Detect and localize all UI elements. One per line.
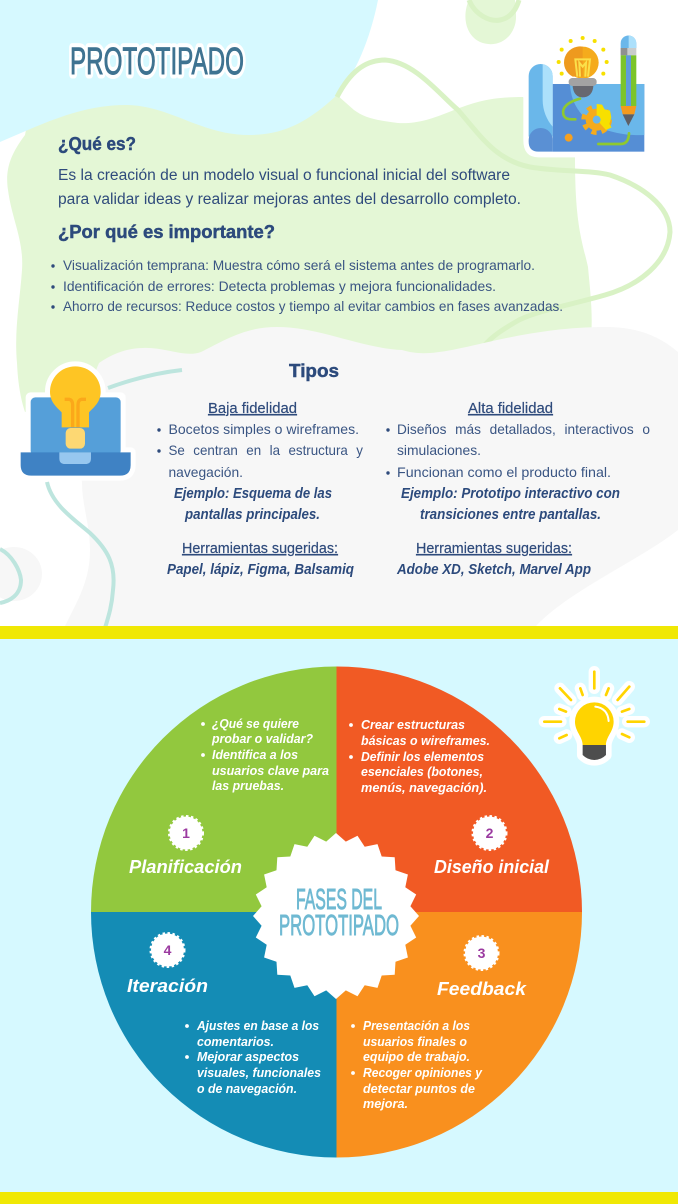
column: baja fidelidad: navegación. — [168, 464, 243, 480]
badge 1 — [169, 816, 203, 850]
column: alta fidelidad: Herramientas sugeridas: — [416, 541, 572, 557]
badge 3 — [464, 936, 498, 970]
column: baja fidelidad: Herramientas sugeridas: — [182, 541, 338, 557]
title: PROTOTIPADO — [70, 41, 244, 83]
list: importance: Identificación de errores: Detecta problemas y mejora funcionalidades. — [63, 278, 496, 294]
column: baja fidelidad: pantallas principales. — [184, 507, 320, 523]
background: teal line upper — [108, 370, 182, 388]
icon: laptop with bulb — [21, 366, 131, 476]
text: feedback points: usuarios finales o — [363, 1035, 467, 1049]
heading: tipos: Tipos — [289, 360, 339, 381]
background: cyan blob — [0, 0, 378, 142]
heading: por que es importante: ¿Por qué es importante? — [58, 221, 275, 242]
column: alta fidelidad: transiciones entre pantallas. — [420, 507, 601, 523]
text: feedback points: detectar puntos de — [363, 1082, 475, 1096]
segment: diseno inicial — [336, 666, 582, 912]
text: planificacion points: probar o validar? — [211, 732, 313, 746]
background: grey blob — [65, 327, 678, 626]
background: long green wavy line — [337, 60, 670, 346]
text: planificacion points: usuarios clave para — [212, 764, 329, 778]
text: diseno points: esenciales (botones, — [361, 765, 483, 779]
column: alta fidelidad: Adobe XD, Sketch, Marvel App — [396, 562, 591, 578]
badge 4: 4 — [164, 942, 172, 958]
icon: light bulb with rays — [544, 672, 644, 760]
center title — [279, 884, 399, 942]
text: feedback points: mejora. — [363, 1097, 408, 1111]
text: diseno points: menús, navegación). — [361, 781, 487, 795]
badge 4 — [150, 933, 184, 967]
column: baja fidelidad: Ejemplo: Esquema de las — [174, 486, 332, 502]
badge 3: 3 — [478, 945, 486, 961]
list: importance: Visualización temprana: Muestra cómo será el sistema antes de programarlo. — [63, 257, 535, 273]
text block: definition — [58, 167, 521, 208]
text: feedback points: Presentación a los — [363, 1019, 470, 1033]
icon: blueprint with bulb and pencil — [523, 35, 644, 157]
column: alta fidelidad: simulaciones. — [397, 442, 481, 458]
label: diseno inicial: Diseño inicial — [434, 856, 550, 877]
column: baja fidelidad: Baja fidelidad — [208, 401, 297, 417]
text: planificacion points — [201, 717, 329, 793]
heading: que es: ¿Qué es? — [58, 133, 136, 154]
label: planificacion: Planificación — [129, 856, 242, 877]
text: diseno points: Definir los elementos — [361, 750, 484, 764]
column: alta fidelidad — [386, 401, 650, 578]
text: feedback points — [351, 1019, 483, 1111]
text: iteracion points: Mejorar aspectos — [197, 1050, 299, 1064]
yellow band bottom — [0, 1192, 678, 1204]
segment: iteracion — [91, 912, 336, 1158]
column: baja fidelidad: Papel, lápiz, Figma, Balsamiq — [167, 562, 354, 578]
text block: definition: para validar ideas y realizar mejoras antes del desarrollo completo. — [58, 191, 521, 208]
column: baja fidelidad: Bocetos simples o wireframes. — [168, 421, 359, 437]
background: small green blob — [465, 0, 516, 44]
column: alta fidelidad: Diseños más detallados, interactivos o — [397, 421, 650, 437]
text: feedback points: Recoger opiniones y — [363, 1066, 483, 1080]
text: iteracion points — [185, 1019, 321, 1096]
title — [70, 41, 244, 83]
column: alta fidelidad: Ejemplo: Prototipo interactivo con — [401, 486, 620, 502]
text: planificacion points: ¿Qué se quiere — [212, 717, 299, 731]
yellow band top — [0, 626, 678, 639]
text: iteracion points: Ajustes en base a los — [196, 1019, 319, 1033]
list: importance: Ahorro de recursos: Reduce costos y tiempo al evitar cambios en fases avanzadas. — [63, 298, 563, 314]
badge 1: 1 — [182, 825, 190, 841]
text: feedback points: equipo de trabajo. — [363, 1050, 470, 1064]
text: iteracion points: visuales, funcionales — [197, 1066, 321, 1080]
segment: feedback — [336, 912, 582, 1158]
column: alta fidelidad: Funcionan como el producto final. — [397, 464, 611, 480]
phases wheel — [91, 666, 582, 1158]
center title: FASES DEL — [296, 884, 382, 916]
background: green blob — [7, 60, 592, 412]
text: diseno points: Crear estructuras — [361, 718, 465, 732]
segment: planificacion — [91, 666, 336, 912]
text: planificacion points: las pruebas. — [212, 779, 284, 793]
text: diseno points: básicas o wireframes. — [361, 734, 490, 748]
badge 2 — [472, 816, 506, 850]
center starburst — [253, 833, 419, 999]
text: planificacion points: Identifica a los — [212, 748, 298, 762]
text: iteracion points: o de navegación. — [197, 1082, 297, 1096]
column: baja fidelidad — [157, 401, 363, 578]
text block: definition: Es la creación de un modelo visual o funcional inicial del software — [58, 167, 510, 184]
center title: PROTOTIPADO — [279, 910, 399, 942]
background: teal line lower — [47, 482, 114, 628]
label: iteracion: Iteración — [127, 975, 208, 996]
title: PROTOTIPADO — [70, 41, 244, 83]
label: feedback: Feedback — [437, 978, 528, 999]
badge 2: 2 — [486, 825, 494, 841]
background: teal loop — [0, 549, 21, 603]
text: diseno points — [349, 718, 490, 795]
background: small grey circle — [0, 547, 42, 601]
bottom section background — [0, 639, 678, 1192]
column: alta fidelidad: Alta fidelidad — [468, 401, 553, 417]
list: importance — [51, 257, 563, 314]
background: small green curve — [469, 0, 519, 20]
text: iteracion points: comentarios. — [197, 1035, 274, 1049]
column: baja fidelidad: Se centran en la estructura y — [168, 442, 363, 458]
